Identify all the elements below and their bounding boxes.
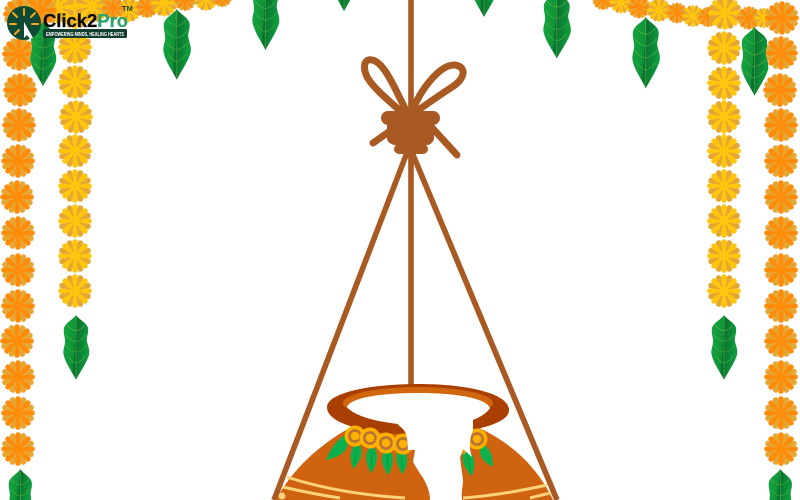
trademark: TM — [122, 4, 133, 13]
knot and bow — [364, 60, 463, 155]
clay pot — [276, 384, 553, 500]
garland: left inner column — [53, 25, 98, 313]
flower necklace — [344, 426, 488, 454]
logo icon — [7, 6, 41, 40]
logo wordmark: Click2Pro — [43, 10, 128, 31]
ropes — [274, 0, 557, 500]
garland: right outer column — [758, 0, 800, 471]
top garland: right — [589, 0, 777, 35]
pot decoration dot — [278, 492, 286, 500]
logo — [7, 4, 133, 40]
pot body — [276, 425, 553, 500]
garland: left outer column — [0, 32, 42, 471]
top garland: left — [0, 0, 235, 36]
logo tagline: EMPOWERING MINDS, HEALING HEARTS — [46, 32, 124, 38]
pot stripes — [283, 477, 551, 498]
flower necklace leaves — [326, 434, 493, 477]
crack in pot — [398, 420, 473, 500]
pot rim — [327, 384, 509, 436]
garland: right inner column — [702, 26, 746, 313]
